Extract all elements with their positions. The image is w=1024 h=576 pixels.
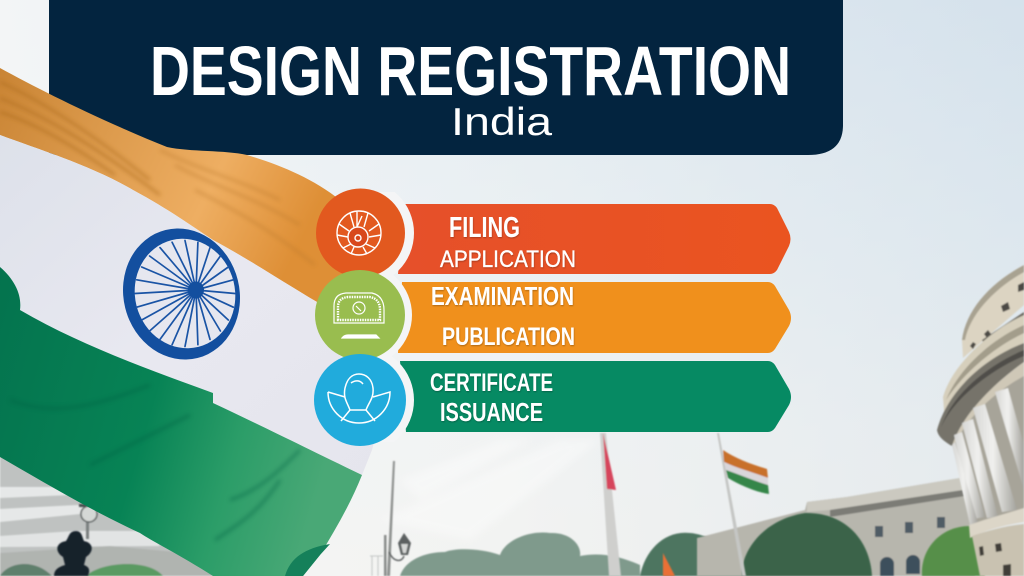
interior	[952, 365, 1024, 525]
cornice	[943, 315, 1024, 423]
ashoka chakra	[109, 216, 254, 372]
title panel	[49, 0, 843, 155]
background: small orange flag	[663, 553, 675, 576]
step bar: examination publication	[398, 281, 791, 353]
background: tree line	[400, 532, 745, 576]
icon: examination document	[315, 270, 405, 360]
background: street lamp and bollard	[54, 504, 97, 576]
label: examination: EXAMINATION	[431, 281, 574, 311]
green band	[0, 267, 362, 576]
step bar: filing application	[398, 204, 790, 274]
background: left office building	[0, 450, 240, 576]
label: filing: FILING	[449, 212, 520, 244]
background: green tree cluster	[742, 513, 985, 576]
white halos behind icons	[379, 192, 414, 429]
icon: filing wheel	[316, 188, 405, 278]
background: long government building	[697, 478, 975, 576]
background: thin pole with lantern	[370, 461, 411, 576]
saffron band	[0, 68, 345, 310]
Indian flag	[0, 68, 385, 576]
title heading: DESIGN REGISTRATION	[150, 32, 791, 110]
upper drum	[962, 265, 1024, 358]
label: issuance: ISSUANCE	[440, 397, 543, 427]
base	[969, 508, 1024, 538]
dark band	[937, 343, 1024, 446]
white band	[0, 135, 385, 475]
background: flagpole with Indian flag	[717, 433, 769, 576]
label: application: APPLICATION	[440, 246, 576, 273]
columns	[952, 388, 1024, 525]
background: flagpole with red flag	[600, 433, 621, 576]
icon: certificate figure	[314, 354, 406, 446]
label: certificate: CERTIFICATE	[430, 369, 553, 397]
subtitle: India	[451, 101, 552, 144]
step bar: certificate issuance	[400, 361, 791, 432]
background: rotunda building	[937, 265, 1024, 576]
label: publication: PUBLICATION	[442, 323, 575, 351]
